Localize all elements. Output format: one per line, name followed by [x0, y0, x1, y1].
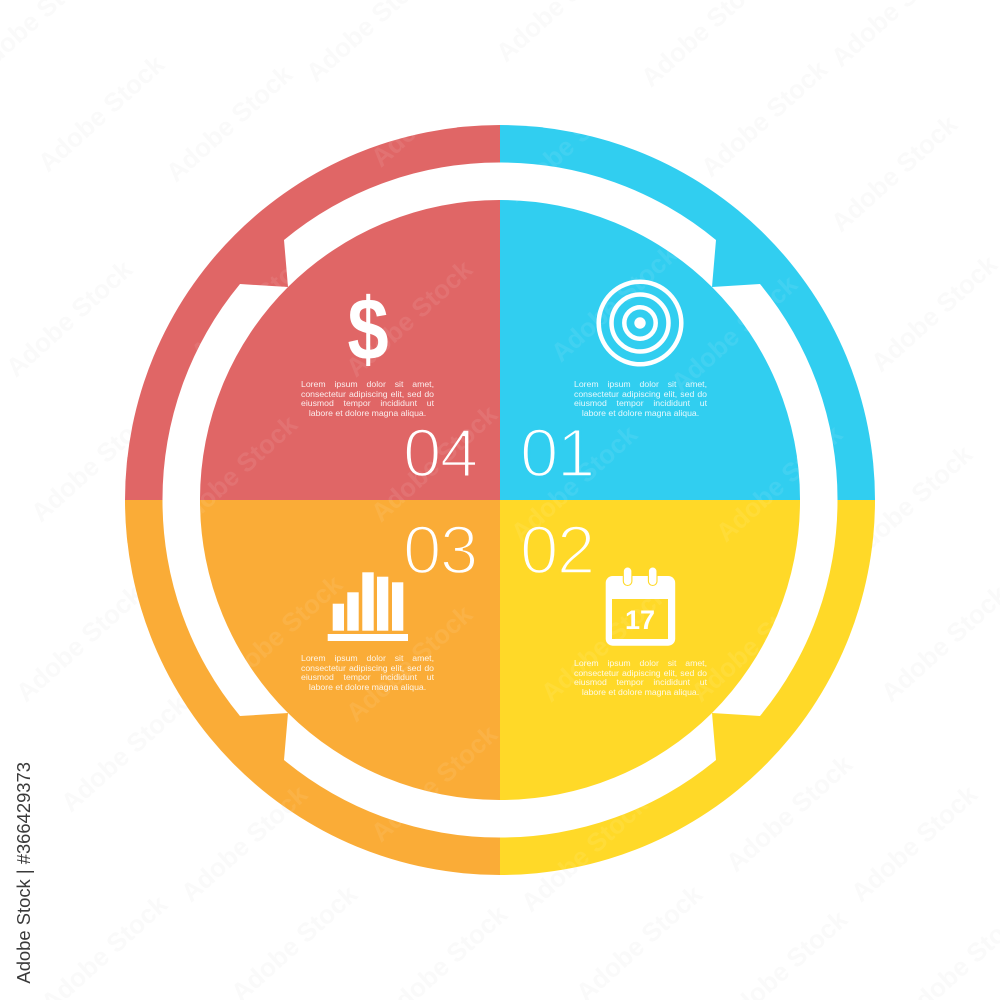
text: Adobe Stock [160, 59, 298, 188]
text block 01: consectetur adipiscing elit, sed do [574, 389, 707, 399]
text: Adobe Stock [535, 579, 673, 708]
text: Adobe Stock [165, 409, 303, 538]
text: Adobe Stock [845, 779, 983, 908]
text block 03: labore et dolore magna aliqua. [309, 682, 426, 692]
icon: calendar [606, 567, 675, 646]
text: Adobe Stock [32, 49, 170, 178]
text: Adobe Stock [25, 399, 163, 528]
icon: target [599, 282, 681, 364]
text: Adobe Stock [695, 54, 833, 183]
panel: 03 orange quadrant [125, 500, 500, 875]
white ring band top [500, 162, 716, 287]
text: Adobe Stock [210, 569, 348, 698]
text: Adobe Stock [340, 254, 478, 383]
text block 04 [301, 380, 435, 420]
text block 03 [301, 654, 435, 694]
white ring band left [162, 284, 288, 500]
text block 01 [574, 380, 708, 420]
text: Adobe Stock [10, 579, 148, 708]
text: Adobe Stock [825, 109, 963, 238]
text: Adobe Stock [500, 79, 638, 208]
text block 03: eiusmod tempor incididunt ut [301, 672, 434, 682]
text: Adobe Stock [515, 789, 653, 918]
text: Adobe Stock [865, 249, 1000, 378]
number 02: 02 [520, 512, 594, 588]
text: Adobe Stock [340, 599, 478, 728]
text: Adobe Stock [515, 789, 653, 918]
white ring band right [712, 500, 838, 716]
text block 04: eiusmod tempor incididunt ut [301, 398, 434, 408]
text block 01: eiusmod tempor incididunt ut [574, 398, 707, 408]
text: Adobe Stock [365, 44, 503, 173]
text: Adobe Stock [175, 779, 313, 908]
text: Adobe Stock [185, 239, 323, 368]
text block 02: consectetur adipiscing elit, sed do [574, 668, 707, 678]
text: Adobe Stock [55, 689, 193, 818]
text: Adobe Stock [365, 719, 503, 848]
text: Adobe Stock [695, 54, 833, 183]
stock id caption: Adobe Stock | #366429373 [13, 762, 34, 984]
text: Adobe Stock [365, 399, 503, 528]
text block 02: eiusmod tempor incididunt ut [574, 677, 707, 687]
text block 03: consectetur adipiscing elit, sed do [301, 663, 434, 673]
panel: 01 blue quadrant [500, 125, 875, 500]
blue segment shape [500, 125, 875, 500]
yellow segment shape [500, 500, 875, 875]
text: Adobe Stock [840, 439, 978, 568]
white ring band top [284, 162, 500, 287]
text: Adobe Stock [665, 269, 803, 398]
number 04: 04 [403, 414, 477, 492]
white ring band left [162, 500, 288, 716]
icon: bar chart [328, 572, 408, 641]
text block 04: labore et dolore magna aliqua. [309, 408, 426, 418]
text: Adobe Stock [720, 749, 858, 878]
text: Adobe Stock [505, 419, 643, 548]
red segment shape [125, 125, 500, 500]
panel: 04 red quadrant [125, 125, 500, 500]
text: Adobe Stock [545, 239, 683, 368]
number 03: 03 [403, 512, 477, 588]
text block 02 [574, 659, 708, 699]
text block 01: labore et dolore magna aliqua. [582, 408, 699, 418]
white ring band bottom [284, 713, 500, 838]
white ring band right [712, 284, 838, 500]
panel: 02 yellow quadrant [500, 500, 875, 875]
text: Adobe Stock [710, 419, 848, 548]
text: Adobe Stock [175, 779, 313, 908]
text: Adobe Stock [0, 254, 138, 383]
icon: dollar sign: $ [347, 280, 389, 379]
icon: calendar: 17 [625, 605, 655, 635]
text block 02: labore et dolore magna aliqua. [582, 687, 699, 697]
text block 04: consectetur adipiscing elit, sed do [301, 389, 434, 399]
number 01: 01 [520, 414, 594, 492]
text: Adobe Stock [160, 59, 298, 188]
orange segment shape [125, 500, 500, 875]
text: Adobe Stock [685, 579, 823, 708]
white ring band bottom [500, 713, 716, 838]
